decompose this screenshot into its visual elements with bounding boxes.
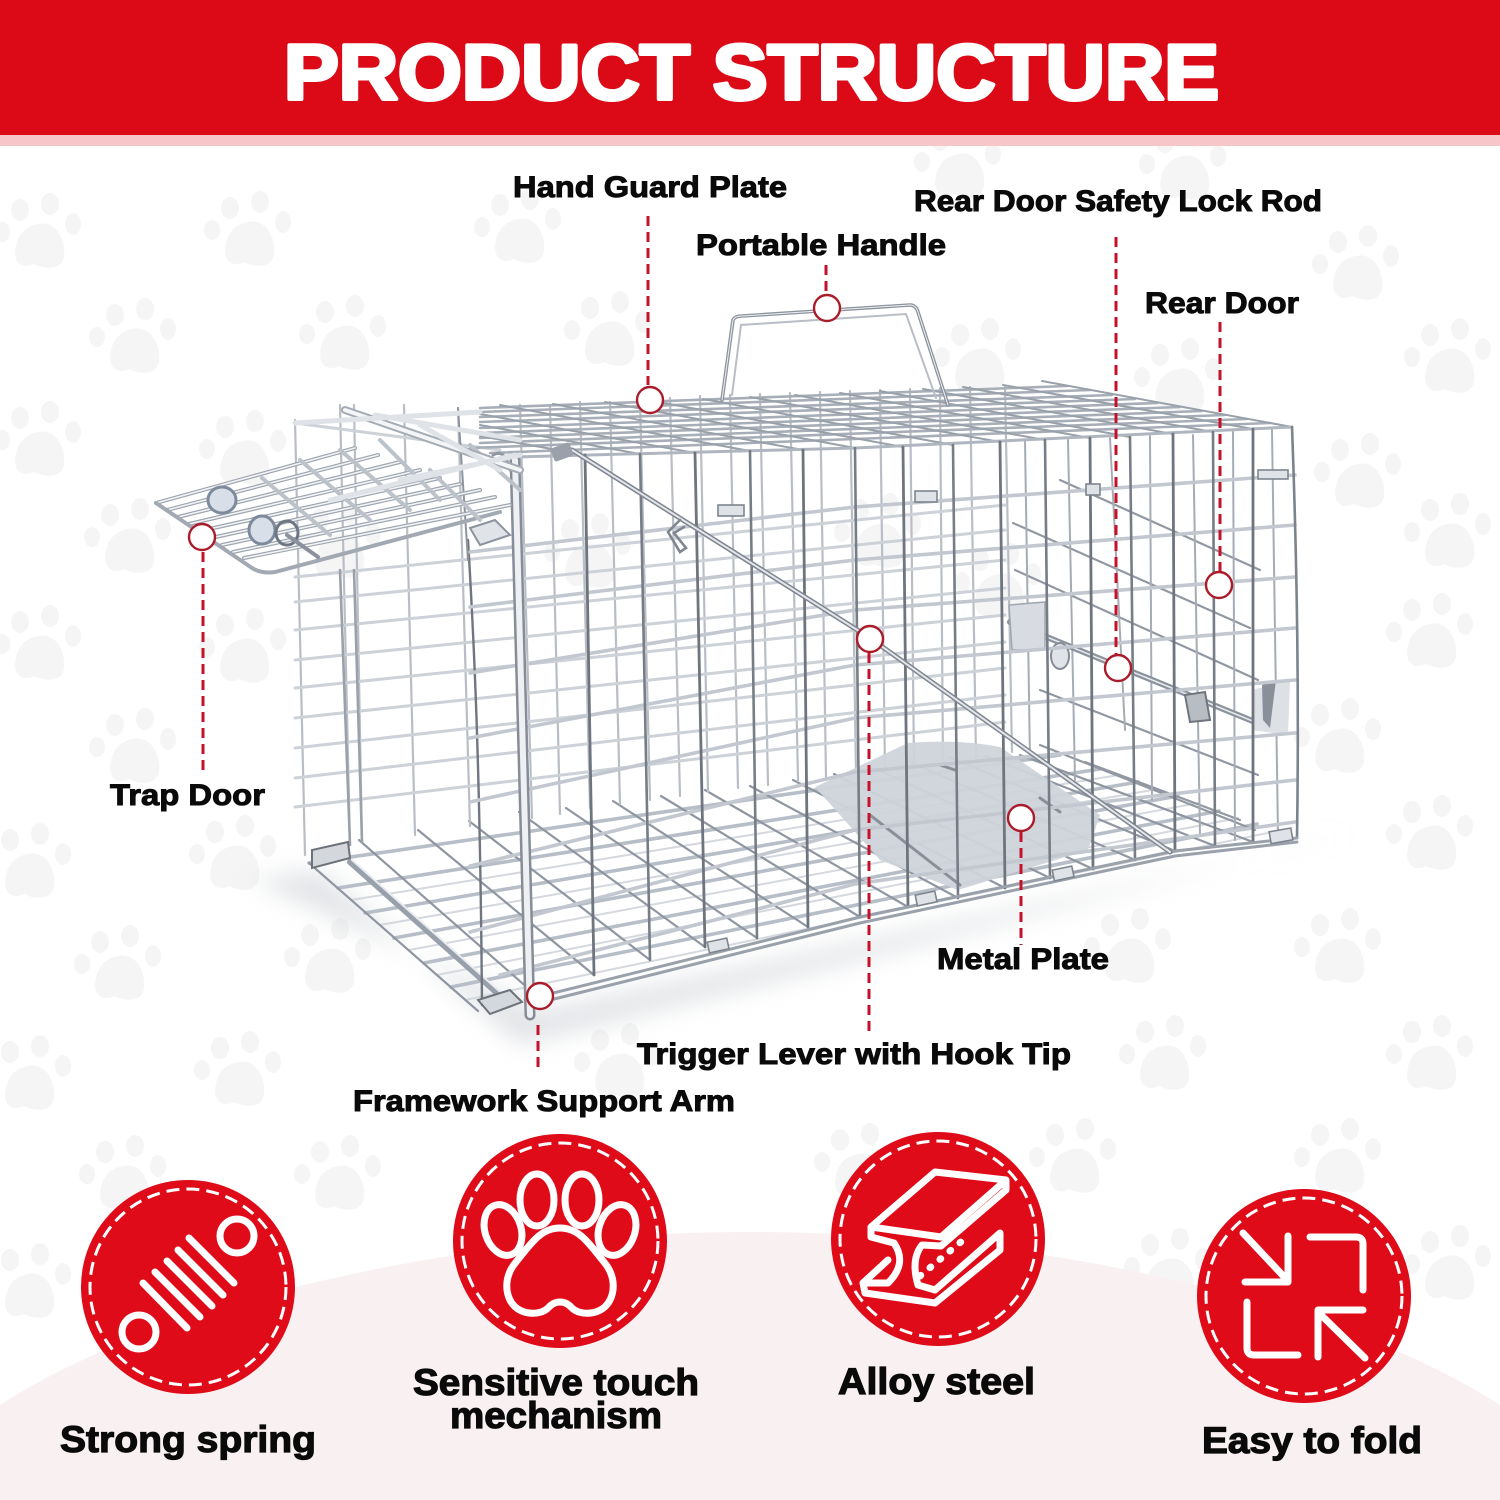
- trap door: [156, 410, 520, 572]
- callout: Portable Handle: [696, 229, 946, 321]
- framework support arm: [312, 453, 530, 1015]
- far wall wires: [295, 386, 1012, 1005]
- title: PRODUCT STRUCTURE: [284, 28, 1219, 116]
- feature: Strong spring: Strong spring: [60, 1419, 316, 1460]
- feature: Sensitive touch mechanism: [413, 1134, 699, 1436]
- callout: Hand Guard Plate: [513, 171, 787, 413]
- feature: Sensitive touch mechanism: Sensitive touch: [413, 1362, 699, 1403]
- background paw pattern: [0, 123, 1491, 1318]
- rear door and safety lock rod: [1009, 430, 1290, 840]
- near side wall wires: [458, 408, 1298, 975]
- floor grid: [309, 755, 1277, 1011]
- callout: Rear Door: Rear Door: [1145, 287, 1299, 320]
- callout: Trap Door: Trap Door: [110, 779, 265, 812]
- icon: spring: [81, 1180, 295, 1394]
- title banner: [0, 0, 1500, 146]
- callout: Framework Support Arm: [353, 983, 735, 1118]
- callout: Metal Plate: [937, 805, 1109, 976]
- wire clip brackets: [707, 470, 1293, 953]
- feature: Alloy steel: [831, 1132, 1045, 1402]
- feature: Sensitive touch mechanism: mechanism: [450, 1395, 662, 1436]
- feature: Strong spring: [60, 1180, 316, 1460]
- icon: steel I-beam: [831, 1132, 1045, 1346]
- portable handle: [722, 305, 948, 405]
- callout: Rear Door Safety Lock Rod: [914, 185, 1322, 681]
- callout: Hand Guard Plate: Hand Guard Plate: [513, 171, 787, 204]
- feature: Alloy steel: Alloy steel: [838, 1361, 1035, 1402]
- trigger lever with hook: [550, 442, 1170, 852]
- ground shadow: [250, 830, 1360, 1045]
- callout: Portable Handle: Portable Handle: [696, 229, 946, 262]
- callout: Trigger Lever with Hook Tip: [637, 626, 1071, 1071]
- callout: Metal Plate: Metal Plate: [937, 943, 1109, 976]
- icon: fold arrows: [1197, 1189, 1411, 1403]
- pink bottom arc background: [0, 1232, 1500, 1500]
- roof grid: [470, 381, 1292, 457]
- callout: Rear Door Safety Lock Rod: Rear Door Safety Lock Rod: [914, 185, 1322, 218]
- feature: Easy to fold: [1197, 1189, 1422, 1461]
- metal plate: [815, 742, 1100, 890]
- icon: paw: [453, 1134, 667, 1348]
- callout: Trigger Lever with Hook Tip: Trigger Lever with Hook Tip: [637, 1038, 1071, 1071]
- callout: Trap Door: [110, 524, 265, 812]
- callout: Framework Support Arm: Framework Support Arm: [353, 1085, 735, 1118]
- front bottom rail: [525, 838, 1297, 1005]
- feature: Easy to fold: Easy to fold: [1202, 1420, 1422, 1461]
- product photo: wire cage trap: [156, 305, 1360, 1045]
- callout: Rear Door: [1145, 287, 1299, 598]
